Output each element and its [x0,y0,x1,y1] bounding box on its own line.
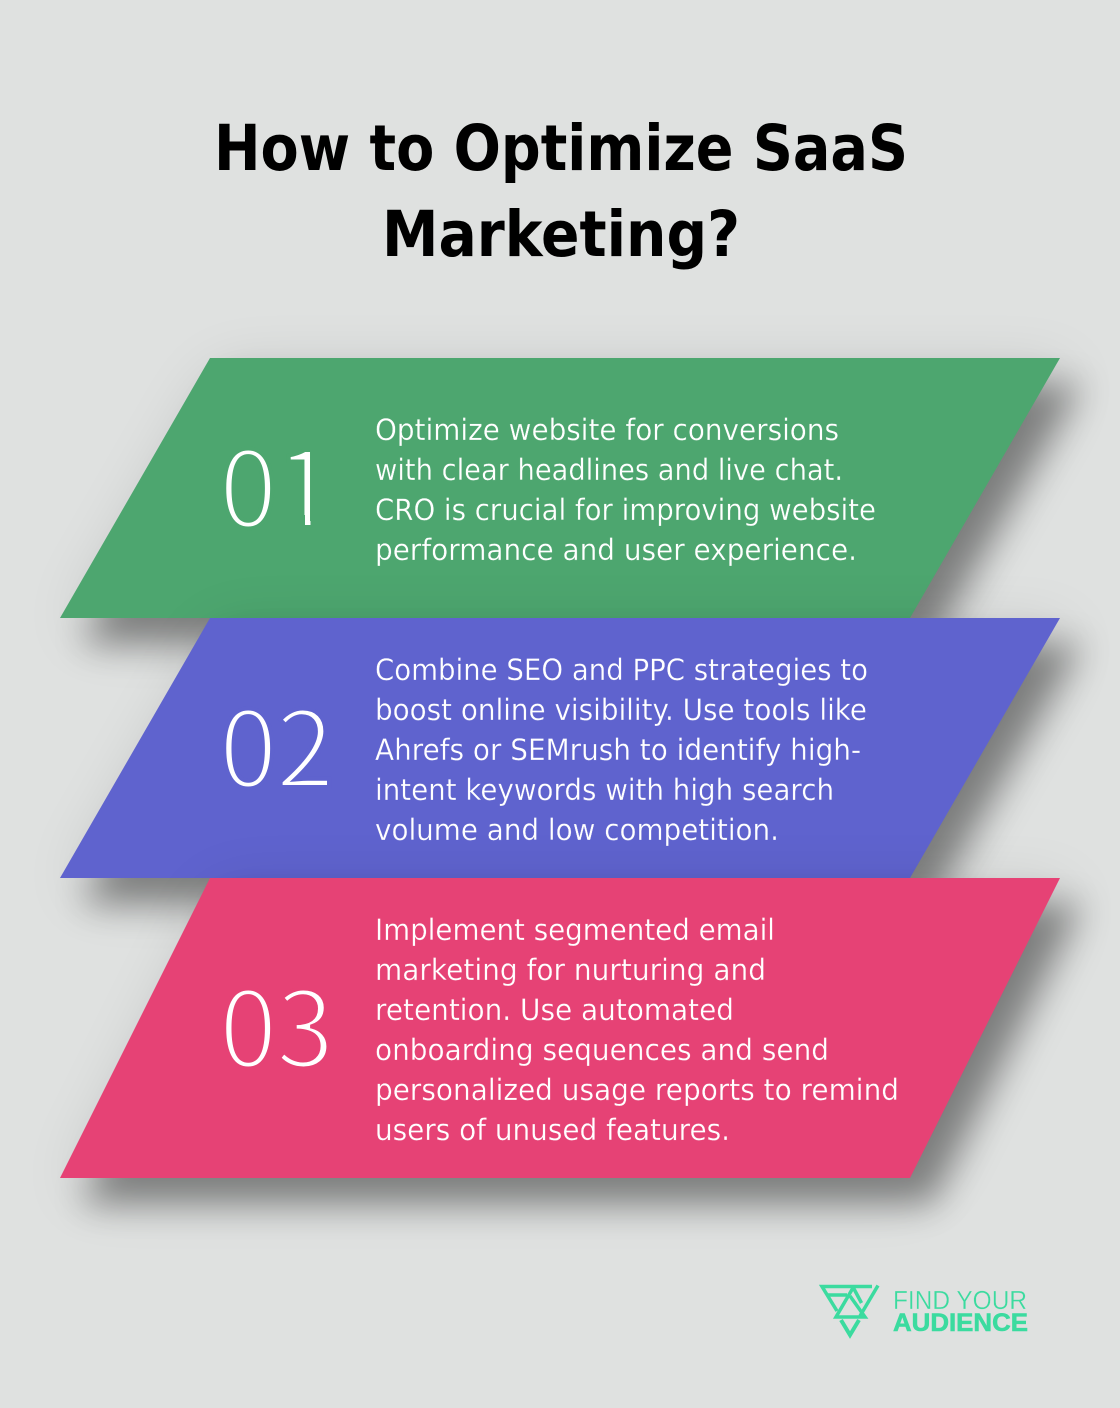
title [214,112,908,271]
title: Marketing? [382,198,740,271]
text block: step 03: retention. Use automated [375,993,734,1027]
title: How to Optimize SaaS [214,112,908,185]
text block: step 03: users of unused features. [375,1113,730,1147]
text block: step 02: boost online visibility. Use tools like [375,693,867,727]
text block: step 02: intent keywords with high search [375,773,834,807]
text block: step 01 [375,413,876,567]
text block: step 02: volume and low competition. [375,813,779,847]
text block: step 02: Ahrefs or SEMrush to identify high- [375,733,861,767]
text block: step 01: with clear headlines and live chat. [375,453,843,487]
icon: triangle mark [822,1286,878,1335]
wordmark: AUDIENCE [893,1309,1028,1337]
text block: step 01: CRO is crucial for improving website [375,493,876,527]
text block: step 02: Combine SEO and PPC strategies to [375,653,868,687]
parallelogram: green [60,358,1060,618]
logo [822,1286,1028,1337]
text block: step 01: Optimize website for conversions [375,413,839,447]
panel: step 03 [60,878,1082,1204]
text block: step 03 [375,913,899,1147]
number 03: 03 [219,946,334,1098]
number 01: 01 [219,406,334,558]
text block: step 03: onboarding sequences and send [375,1033,829,1067]
number 02: 02 [219,666,334,818]
parallelogram: pink [60,878,1060,1178]
text block: step 03: Implement segmented email [375,913,775,947]
text block: step 03: marketing for nurturing and [375,953,766,987]
wordmark: FIND YOUR [893,1287,1027,1315]
text block: step 03: personalized usage reports to remind [375,1073,899,1107]
text block: step 01: performance and user experience. [375,533,857,567]
panel: step 01 [60,358,1082,644]
wordmark [893,1287,1028,1337]
text block: step 02 [375,653,868,847]
parallelogram: blue [60,618,1060,878]
panel: step 02 [60,618,1082,904]
